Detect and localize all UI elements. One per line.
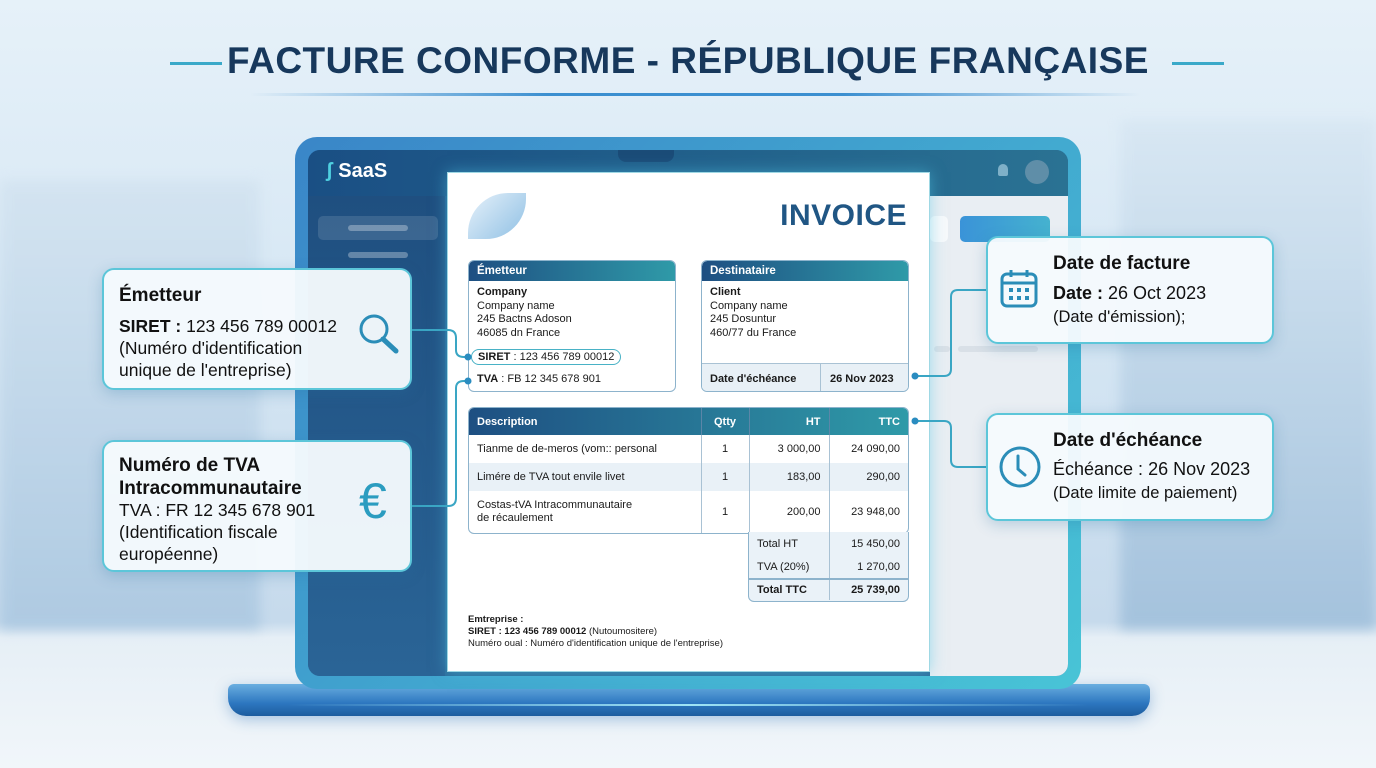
callout: emetteur: Émetteur [119, 285, 201, 306]
line items table: Qtty [714, 416, 736, 428]
destinataire box: 26 Nov 2023 [830, 373, 894, 385]
callout: emetteur: SIRET : 123 456 789 00012 [119, 316, 337, 336]
line items table: 200,00 [787, 506, 820, 518]
line items table: 183,00 [787, 471, 820, 483]
line items table: Tianme de de-meros (vom:: personal [477, 443, 657, 455]
line items table: 290,00 [866, 471, 900, 483]
line items table: Costas-tVA Intracommunautaire [477, 499, 632, 511]
emetteur box: 46085 dn France [477, 326, 560, 338]
totals: Total HT [757, 538, 798, 550]
callout: date d'echeance [986, 413, 1274, 521]
totals: 25 739,00 [851, 584, 900, 596]
title: FACTURE CONFORME - RÉPUBLIQUE FRANÇAISE [227, 40, 1149, 81]
callout: TVA: Numéro de TVA [119, 455, 260, 476]
callout: emetteur: (Numéro d'identification [119, 338, 302, 358]
line items table [468, 407, 909, 534]
logo: ʃ SaaS [326, 160, 387, 182]
icon: clock [1000, 446, 1040, 488]
totals: 15 450,00 [851, 538, 900, 550]
line items table: TTC [879, 416, 900, 428]
totals: 1 270,00 [857, 561, 900, 573]
footer text: Emtreprise : [468, 614, 523, 625]
invoice heading: INVOICE [780, 199, 907, 232]
footer text: SIRET : 123 456 789 00012 (Nutoumositere) [468, 626, 657, 637]
destinataire box: 245 Dosuntur [710, 313, 776, 325]
line items table: 1 [722, 443, 728, 455]
bell/avatar [998, 164, 1008, 176]
line items table: 3 000,00 [778, 443, 820, 455]
icon: calendar [1000, 270, 1038, 308]
right area [930, 196, 1068, 676]
callout: date de facture: (Date d'émission); [1053, 308, 1185, 326]
destinataire box: 460/77 du France [710, 326, 796, 338]
callout: TVA: (Identification fiscale [119, 522, 278, 542]
callout: TVA: Intracommunautaire [119, 478, 302, 499]
footer text [468, 614, 723, 649]
callout: date d'echeance: Échéance : 26 Nov 2023 [1053, 459, 1250, 479]
totals: TVA (20%) [757, 561, 809, 573]
emetteur box: SIRET : 123 456 789 00012 [478, 351, 614, 363]
callout: date de facture: Date : 26 Oct 2023 [1053, 283, 1206, 303]
emetteur box [468, 260, 676, 392]
footer text: Numéro oual : Numéro d'identification unique de l'entreprise) [468, 638, 723, 649]
destinataire box: Date d'échéance [710, 373, 796, 385]
destinataire box: Client [710, 286, 741, 298]
icon: euro: € [359, 473, 387, 529]
callout: date de facture [986, 236, 1274, 344]
line items table: 1 [722, 506, 728, 518]
callout: TVA: TVA : FR 12 345 678 901 [119, 500, 315, 520]
emetteur box: 245 Bactns Adoson [477, 313, 572, 325]
line items table: 23 948,00 [851, 506, 900, 518]
line items table: 1 [722, 471, 728, 483]
topbar [308, 150, 1068, 196]
destinataire box [701, 260, 909, 392]
totals [748, 532, 909, 602]
destinataire box: Destinataire [710, 265, 776, 277]
sidebar [308, 196, 445, 676]
destinataire box: Company name [710, 300, 788, 312]
laptop [295, 137, 1081, 689]
callout: emetteur [102, 268, 412, 390]
callout: TVA [102, 440, 412, 572]
line items table: HT [806, 416, 820, 428]
line items table: Description [477, 416, 538, 428]
line items table: 24 090,00 [851, 443, 900, 455]
emetteur box: Company [477, 286, 527, 298]
line items table: de récaulement [477, 512, 553, 524]
line items table: Limére de TVA tout envile livet [477, 471, 625, 483]
invoice logo [468, 193, 526, 239]
emetteur box: TVA : FB 12 345 678 901 [477, 373, 601, 385]
callout: emetteur: unique de l'entreprise) [119, 360, 292, 380]
callout: date d'echeance: (Date limite de paiement) [1053, 484, 1237, 502]
callout: date de facture: Date de facture [1053, 253, 1190, 274]
totals: Total TTC [757, 584, 807, 596]
callout: TVA: européenne) [119, 544, 218, 564]
invoice document [447, 172, 930, 672]
callout: date d'echeance: Date d'échéance [1053, 430, 1202, 451]
emetteur box: Émetteur [477, 265, 527, 277]
icon: magnifier [360, 314, 398, 354]
laptop base [228, 684, 1150, 716]
emetteur box: Company name [477, 300, 555, 312]
